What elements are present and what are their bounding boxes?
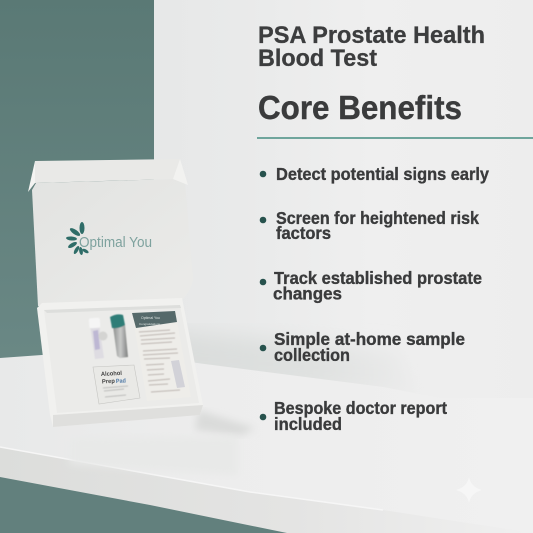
blood collection vial [89, 318, 108, 359]
alcohol prep pad: Alcohol [101, 371, 122, 378]
heading: product title [258, 22, 485, 72]
sample tube [110, 314, 128, 358]
counter bottom shadow band [0, 477, 287, 533]
heading: core benefits: Core Benefits [258, 89, 462, 126]
benefit 3 [260, 268, 482, 304]
base front wall [53, 405, 203, 427]
instruction leaflet: Optimal You [141, 316, 160, 320]
benefit 4: Simple at-home sample [274, 329, 465, 349]
heading: product title: PSA Prostate Health [258, 22, 485, 49]
logo [66, 222, 152, 255]
benefit 1: Detect potential signs early [276, 164, 489, 184]
box base [37, 298, 203, 427]
alcohol prep pad: Prep [102, 379, 115, 385]
benefit 4: collection [274, 345, 350, 365]
sparkle [456, 477, 482, 503]
benefit 2: Screen for heightened risk [276, 208, 479, 228]
benefit 2: factors [276, 223, 331, 243]
alcohol prep pad [93, 365, 140, 404]
benefit 3: changes [273, 284, 342, 304]
benefit 4 [260, 329, 465, 365]
wall shadow above counter [154, 330, 420, 400]
green wall panel [0, 0, 154, 360]
alcohol prep pad: Pad [116, 378, 126, 385]
lid inner flap [35, 159, 180, 183]
heading: product title: Blood Test [258, 45, 377, 72]
base tray [44, 305, 199, 413]
marble counter top [0, 349, 533, 533]
instruction leaflet [132, 311, 191, 401]
counter front edge [0, 447, 533, 533]
instruction leaflet: Congratulations [139, 322, 161, 326]
benefit 2 [260, 208, 479, 243]
benefit 5: included [274, 414, 342, 434]
lid right flap [173, 159, 188, 185]
lid left flap [28, 161, 35, 192]
box lid [28, 159, 193, 306]
box reflection on counter [70, 436, 238, 476]
leaflet header [132, 311, 177, 328]
benefit 3: Track established prostate [274, 268, 482, 288]
product box [28, 159, 203, 427]
logo leaves [66, 222, 89, 255]
logo wordmark: Optimal You [79, 234, 152, 251]
box shadow on counter [195, 410, 255, 436]
benefit 5 [260, 398, 447, 434]
benefit 5: Bespoke doctor report [274, 398, 447, 418]
